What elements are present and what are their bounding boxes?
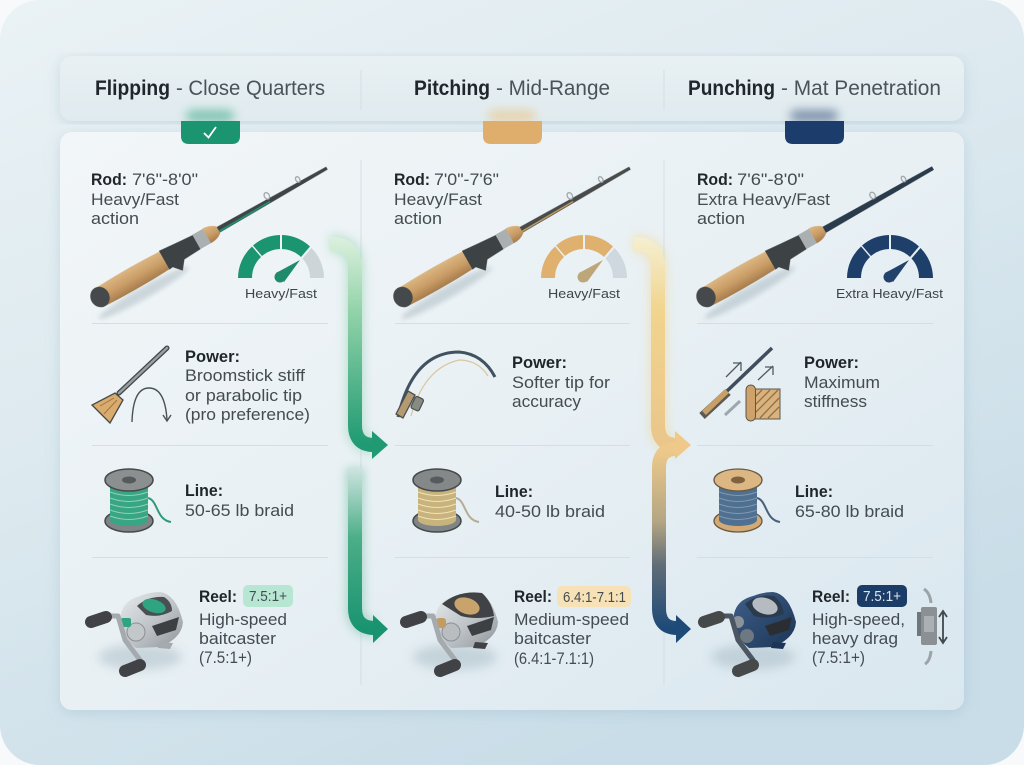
reel text: Punching: (7.5:1+) — [812, 649, 865, 667]
heading: Punching: - Mat Penetration — [781, 77, 941, 100]
rod icon: Pitching — [387, 159, 642, 324]
reel text: Pitching — [514, 586, 631, 668]
rod icon: Punching — [690, 159, 945, 324]
line text: Pitching — [495, 483, 605, 521]
line text: Flipping: 50-65 lb braid — [185, 502, 294, 520]
gauge: Extra Heavy/Fast navy — [836, 235, 943, 301]
line text: Flipping: Line: — [185, 482, 223, 500]
power icon: broom and arc — [92, 348, 171, 423]
reel text: Flipping: baitcaster — [199, 630, 277, 648]
arrow: Pitching rod to punching power — [633, 244, 691, 459]
reel icon: navy — [704, 592, 796, 671]
tab: Pitching — [483, 110, 542, 144]
rod spec text: Punching: Rod: — [697, 171, 733, 189]
power text: Pitching: accuracy — [512, 393, 582, 411]
rod spec text: Punching — [697, 171, 830, 228]
column: Flipping — [84, 159, 339, 671]
panel: content card — [60, 132, 964, 710]
gauge: Heavy/Fast green: Heavy/Fast — [245, 286, 317, 301]
power text: Pitching — [512, 354, 611, 411]
rod spec text: Flipping — [91, 171, 198, 228]
heading: Pitching: Pitching — [414, 77, 490, 100]
line text: Flipping — [185, 482, 294, 520]
heading: Flipping: Flipping — [95, 77, 170, 100]
power text: Pitching: Power: — [512, 354, 567, 372]
rod spec text: Pitching — [394, 171, 499, 228]
reel text: Pitching: Reel: — [514, 588, 552, 606]
rod spec text: Flipping: 7'6"-8'0" — [132, 171, 198, 189]
reel text: Pitching: Medium-speed — [514, 611, 629, 629]
reel icon: green — [91, 592, 183, 671]
reel text: Pitching: baitcaster — [514, 630, 592, 648]
column: Punching — [690, 159, 947, 671]
rod spec text: Punching: 7'6"-8'0" — [737, 171, 804, 189]
column dividers and row dividers — [92, 160, 933, 685]
rod spec text: Pitching: Rod: — [394, 171, 430, 189]
heading: Pitching: - Mid-Range — [496, 77, 610, 100]
tab: Punching — [785, 110, 844, 144]
heading: Punching: Punching — [688, 77, 775, 100]
power text: Flipping: Power: — [185, 348, 240, 366]
reel text: Punching: 7.5:1+ — [863, 589, 901, 605]
reel text: Flipping: Reel: — [199, 588, 237, 606]
power icon: stiff rod and mat — [702, 348, 780, 421]
gauge: Extra Heavy/Fast navy: Extra Heavy/Fast — [836, 286, 943, 301]
arrow: Pitching line to punching reel — [659, 449, 691, 643]
reel text: Punching: High-speed, — [812, 611, 905, 629]
power text: Punching: stiffness — [804, 393, 867, 411]
reel text: Flipping: (7.5:1+) — [199, 649, 252, 667]
power icon: bent rod — [396, 352, 495, 418]
rod icon: Flipping — [84, 159, 339, 324]
gauge: Heavy/Fast tan: Heavy/Fast — [548, 286, 620, 301]
tab: Flipping selected — [181, 110, 240, 144]
column: Pitching — [387, 159, 642, 671]
power text: Pitching: Softer tip for — [512, 374, 611, 392]
heading: Punching — [688, 77, 941, 100]
rod spec text: Pitching: 7'0"-7'6" — [434, 171, 499, 189]
gauge: Heavy/Fast tan — [541, 235, 627, 301]
heading: Flipping — [95, 77, 325, 100]
heading: Pitching — [414, 77, 610, 100]
line spool icon: blue — [714, 469, 780, 532]
line text: Punching — [795, 483, 904, 521]
rod spec text: Flipping: Heavy/Fast — [91, 191, 179, 209]
rod spec text: Punching: Extra Heavy/Fast — [697, 191, 830, 209]
arrow: Flipping rod to pitching power — [330, 244, 388, 459]
line text: Punching: Line: — [795, 483, 833, 501]
panel: header bar — [60, 56, 964, 121]
line text: Pitching: Line: — [495, 483, 533, 501]
power text: Punching: Maximum — [804, 374, 880, 392]
rod spec text: Pitching: action — [394, 210, 442, 228]
reel text: Flipping: 7.5:1+ — [249, 589, 287, 605]
rod spec text: Pitching: Heavy/Fast — [394, 191, 482, 209]
line text: Pitching: 40-50 lb braid — [495, 503, 605, 521]
heading: Flipping: - Close Quarters — [176, 77, 325, 100]
power text: Punching: Power: — [804, 354, 859, 372]
reel text: Flipping — [199, 585, 293, 667]
power text: Flipping — [185, 348, 310, 424]
reel text: Pitching: 6.4:1-7.1:1 — [563, 590, 626, 606]
rod spec text: Punching: action — [697, 210, 745, 228]
icon: heavy drag — [917, 589, 947, 664]
line spool icon: tan — [413, 469, 479, 532]
power text: Punching — [804, 354, 880, 411]
reel text: Punching: Reel: — [812, 588, 850, 606]
power text: Flipping: Broomstick stiff — [185, 367, 305, 385]
reel text: Punching: heavy drag — [812, 630, 898, 648]
reel text: Pitching: (6.4:1-7.1:1) — [514, 650, 594, 668]
power text: Flipping: (pro preference) — [185, 406, 310, 424]
reel text: Flipping: High-speed — [199, 611, 287, 629]
reel icon: tan — [406, 592, 498, 671]
line spool icon: green — [105, 469, 171, 532]
line text: Punching: 65-80 lb braid — [795, 503, 904, 521]
power text: Flipping: or parabolic tip — [185, 387, 302, 405]
gauge: Heavy/Fast green — [238, 235, 324, 301]
arrow: Flipping line to pitching reel — [355, 468, 388, 643]
reel text: Punching — [812, 585, 907, 667]
rod spec text: Flipping: Rod: — [91, 171, 127, 189]
rod spec text: Flipping: action — [91, 210, 139, 228]
